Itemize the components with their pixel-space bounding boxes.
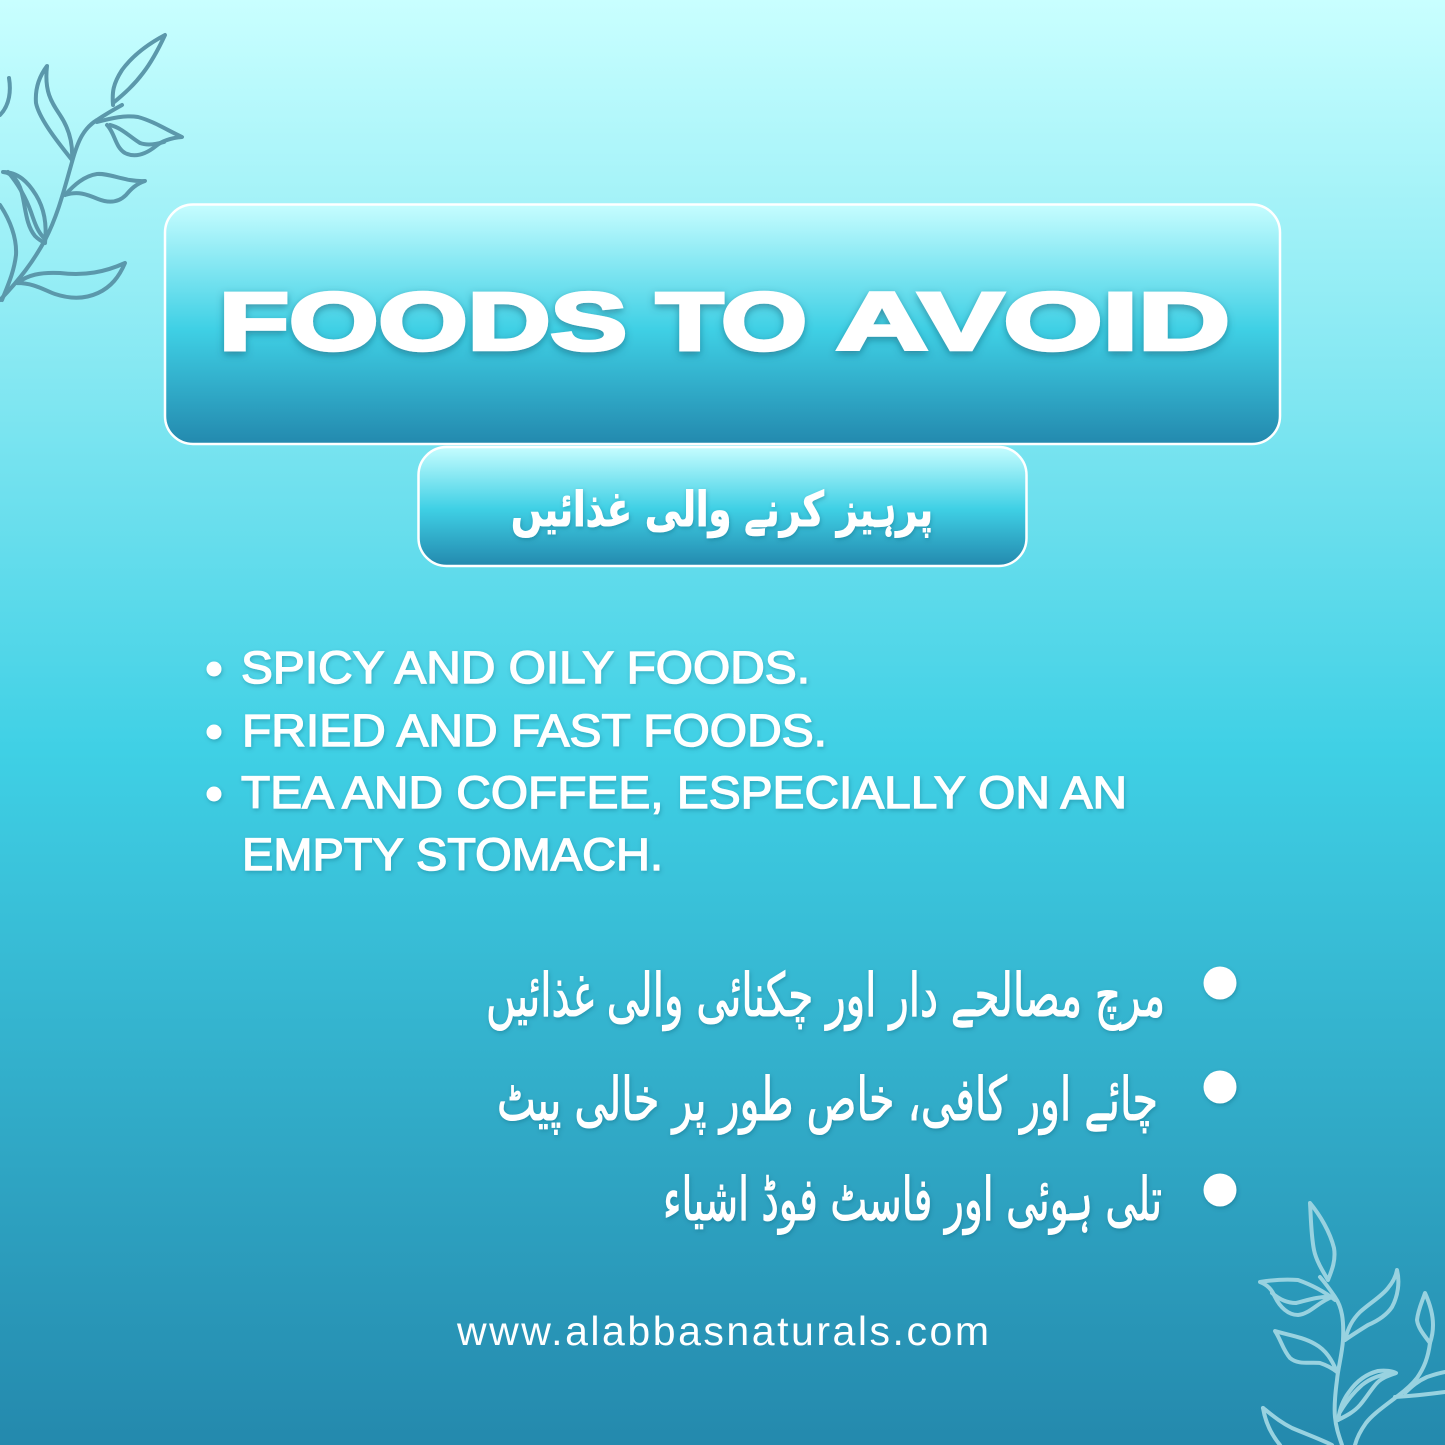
urdu subtitle text: پرہیز کرنے والی غذائیں xyxy=(511,482,933,538)
bullet: spicy and oily foods: SPICY AND OILY FOODS. xyxy=(241,642,810,693)
heading: foods to avoid: FOODS xyxy=(219,276,627,368)
heading: foods to avoid: TO xyxy=(656,276,807,368)
urdu list of foods xyxy=(486,961,1236,1235)
urdu subtitle banner xyxy=(418,447,1026,566)
urdu bullet three: تلی ہوئی اور فاسٹ فوڈ اشیاء xyxy=(663,1165,1162,1235)
bullet: tea and coffee: EMPTY STOMACH. xyxy=(242,829,663,880)
bullet: fried and fast foods: FRIED AND FAST FOODS. xyxy=(242,705,827,756)
bullet: tea and coffee: TEA AND COFFEE, ESPECIALLY ON AN xyxy=(241,767,1127,818)
decoration: leaf branch bottom right xyxy=(1260,1203,1445,1445)
bullet: tea and coffee xyxy=(206,767,1127,880)
decoration: leaf branch top left xyxy=(0,35,182,300)
heading: foods to avoid: AVOID xyxy=(836,276,1230,368)
english list of foods xyxy=(206,642,1127,880)
title banner xyxy=(165,204,1280,444)
website url: www.alabbasnaturals.com xyxy=(456,1308,989,1354)
urdu bullet two: چائے اور کافی، خاص طور پر خالی پیٹ xyxy=(497,1065,1158,1135)
